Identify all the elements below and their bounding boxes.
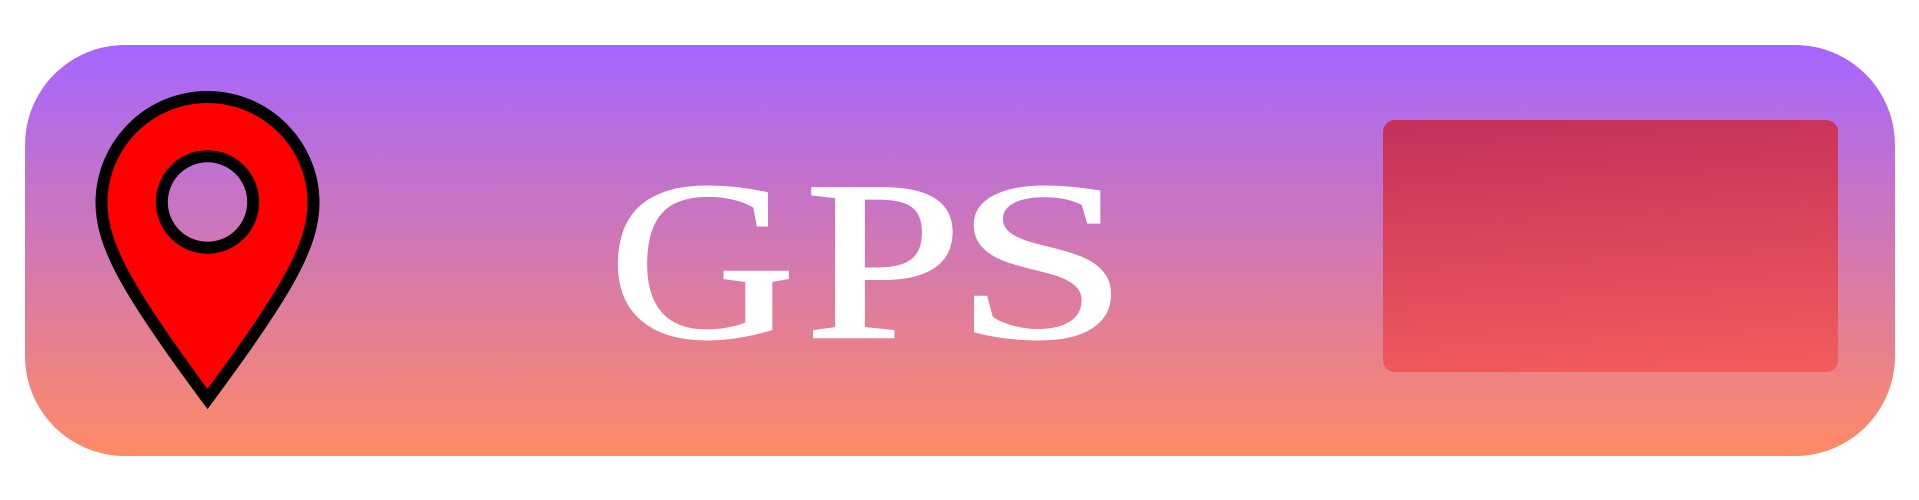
- title: G: [609, 136, 796, 387]
- icon: map pin: [96, 91, 320, 409]
- panel: red rounded box: [1383, 120, 1838, 372]
- title: S: [954, 136, 1129, 387]
- title: P: [805, 136, 962, 387]
